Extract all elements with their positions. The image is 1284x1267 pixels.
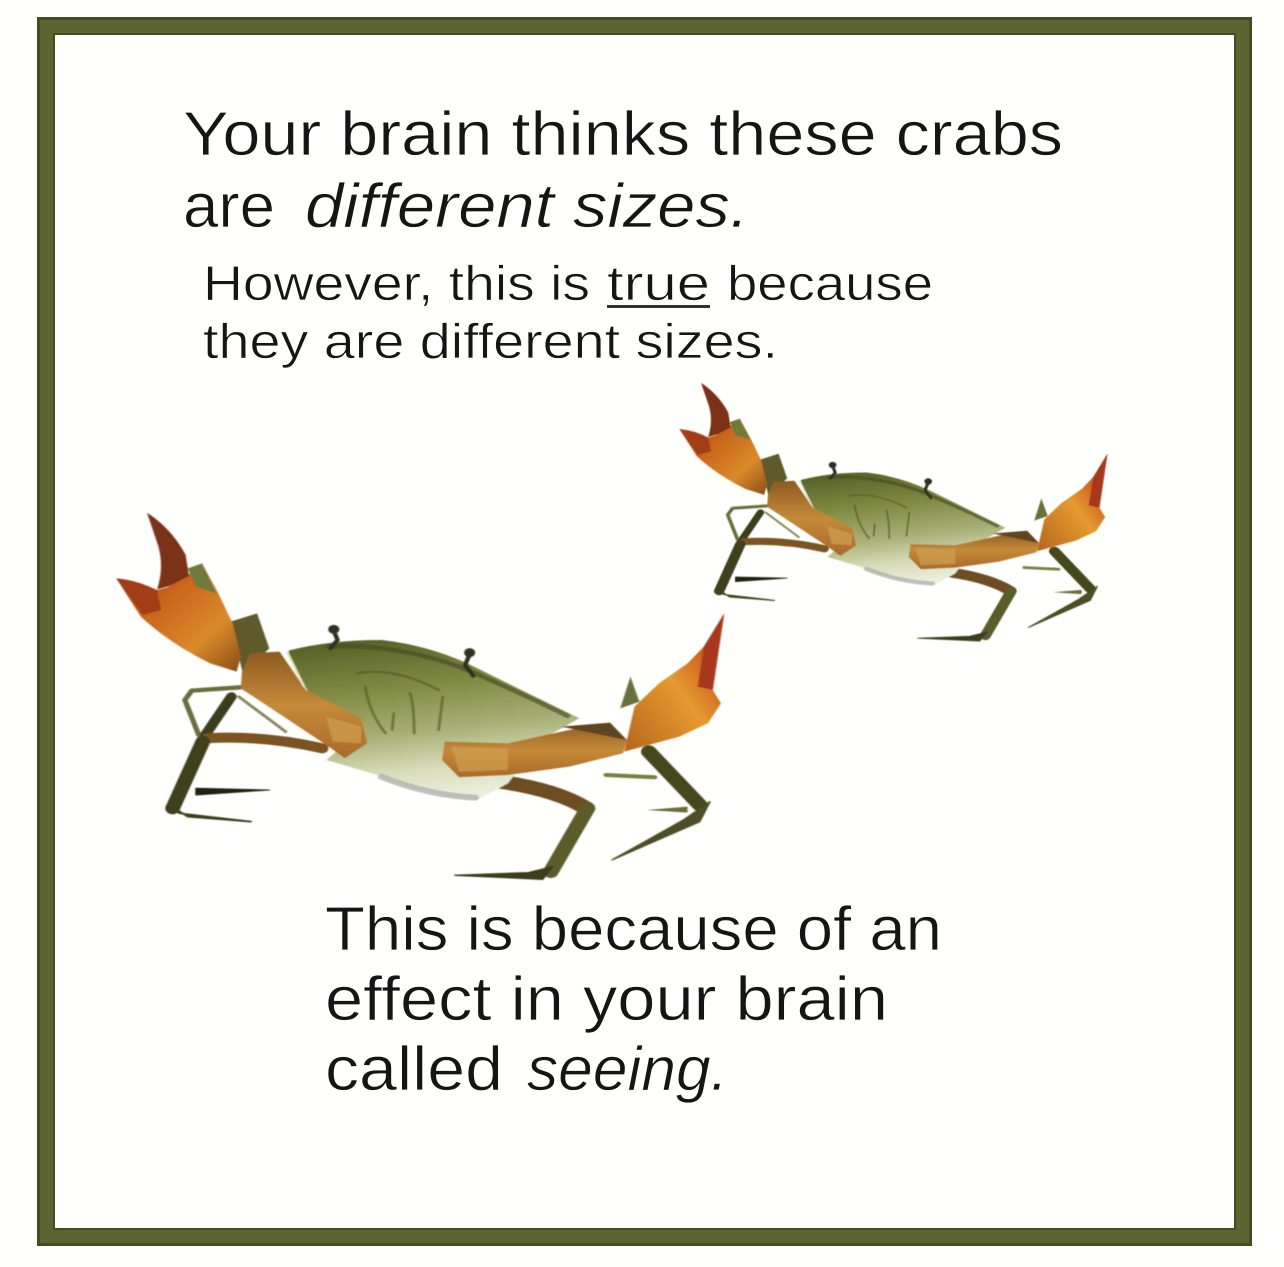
crab eyes bbox=[331, 627, 473, 676]
subheading: however this is true: because bbox=[727, 257, 933, 311]
heading: your brain thinks bbox=[183, 100, 1063, 241]
heading: your brain thinks: are bbox=[183, 172, 275, 241]
crab right claw bbox=[620, 613, 724, 752]
bottom text: this is because: called bbox=[325, 1035, 503, 1104]
crab shell texture bbox=[328, 646, 569, 798]
heading: your brain thinks: different sizes. bbox=[305, 172, 749, 241]
crab arms bbox=[241, 652, 627, 777]
bottom text: this is because bbox=[325, 895, 942, 1104]
bottom text: this is because: effect in your brain bbox=[325, 965, 888, 1034]
bottom text: this is because: seeing. bbox=[527, 1035, 728, 1104]
crab carapace bbox=[288, 640, 579, 799]
subheading: however this is true: they are different sizes. bbox=[203, 315, 778, 369]
subheading: however this is true: However, this is bbox=[203, 257, 590, 311]
large crab bbox=[116, 513, 724, 879]
subheading: however this is true: true bbox=[607, 257, 710, 311]
crab left claw bbox=[116, 513, 269, 673]
subheading: however this is true bbox=[203, 257, 933, 369]
small crab bbox=[679, 383, 1107, 641]
bottom text: this is because: This is because of an bbox=[325, 895, 942, 964]
heading: your brain thinks: Your brain thinks these crabs bbox=[183, 100, 1063, 169]
crab right legs bbox=[455, 752, 710, 879]
crab left legs bbox=[169, 687, 322, 822]
